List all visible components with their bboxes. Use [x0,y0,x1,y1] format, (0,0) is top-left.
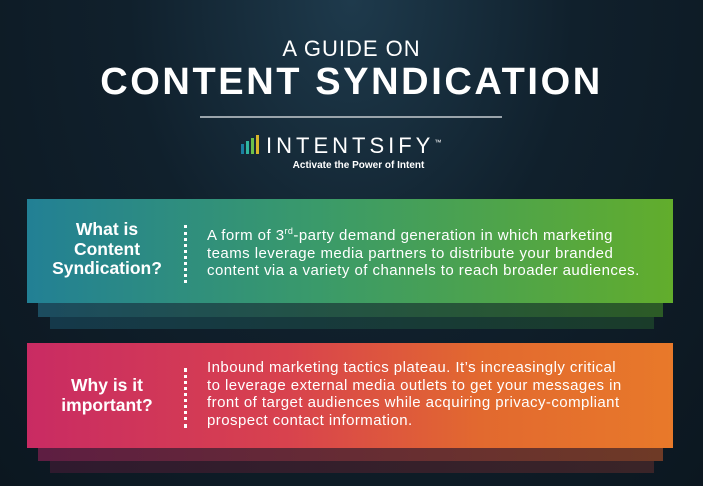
answer text: to leverage external media outlets to get your messages in [207,376,622,394]
title: a guide on: A GUIDE ON [282,36,421,61]
question heading: Why is it [71,375,143,395]
answer text: Inbound marketing tactics plateau. It’s increasingly critical [207,359,616,376]
question heading [52,219,162,278]
answer text: prospect contact information. [207,412,413,428]
panel: what is content syndication [27,199,673,329]
question heading: Syndication? [52,258,162,278]
answer text [207,359,622,428]
answer text: A form of 3rd-party demand generation in which marketing [207,226,613,244]
divider [200,116,502,118]
tagline: Activate the Power of Intent [293,160,424,171]
title: content syndication: CONTENT SYNDICATION [100,61,603,103]
logo: INTENTSIFY™ [266,133,445,158]
question heading [61,375,153,414]
panel: why is it important [27,343,673,473]
question heading: Content [74,238,140,258]
answer text: teams leverage media partners to distribute your branded [207,244,613,262]
answer text: front of target audiences while acquiring privacy-compliant [207,394,620,411]
question heading: important? [61,394,153,414]
question heading: What is [76,219,138,239]
answer text [207,226,640,279]
answer text: content via a variety of channels to reach broader audiences. [207,262,640,279]
